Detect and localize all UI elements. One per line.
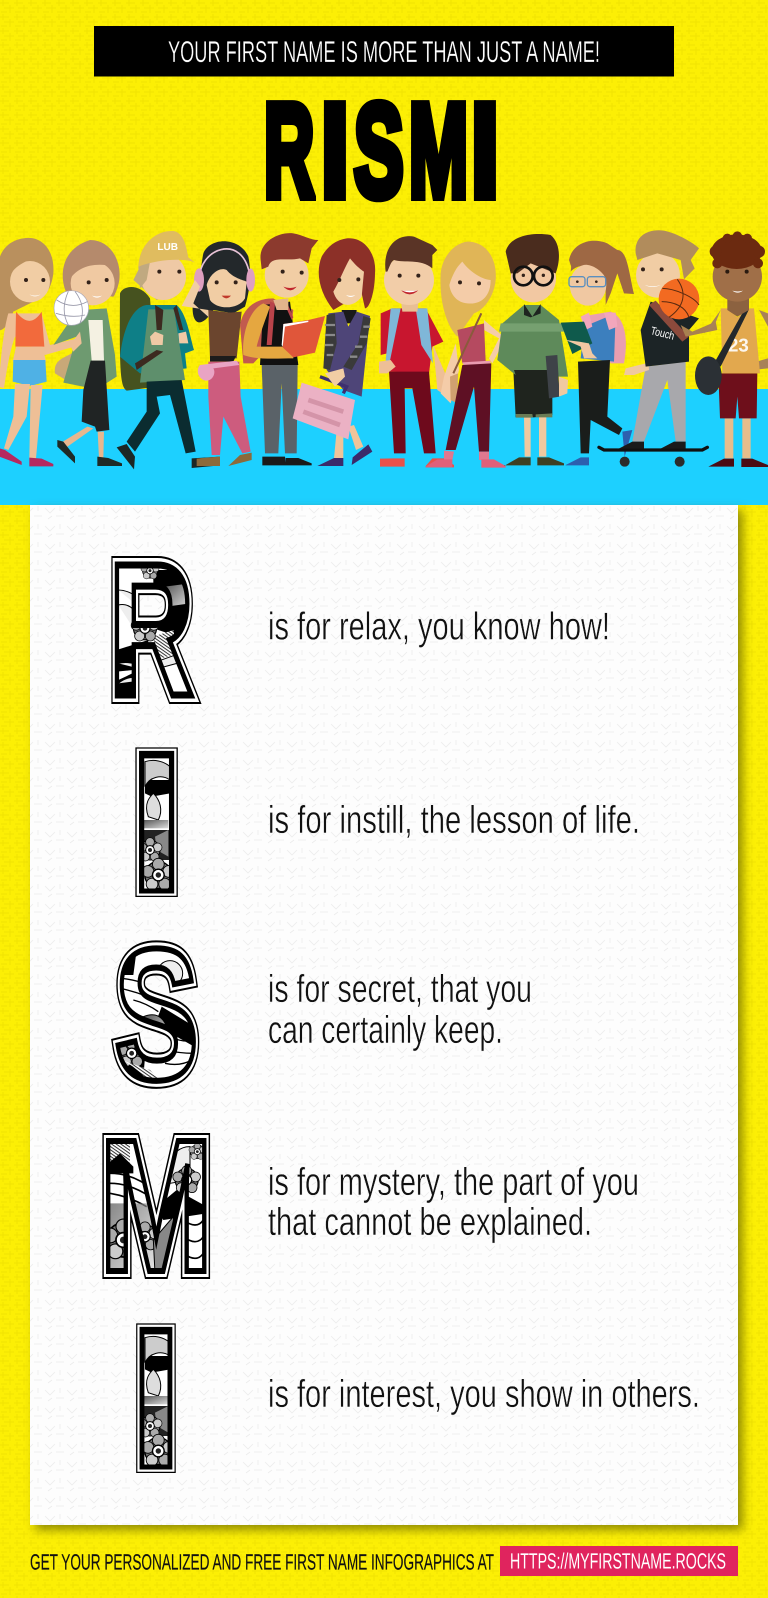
decorative letter I (second): I bbox=[129, 1287, 183, 1510]
decorative letter M: M bbox=[99, 1101, 213, 1312]
person: girl with headphones bbox=[182, 241, 255, 466]
decorative letter I bbox=[135, 747, 178, 897]
text: M lines bbox=[268, 1161, 639, 1244]
decorative letter R bbox=[111, 556, 202, 704]
person: blonde girl bbox=[426, 242, 506, 468]
top banner bbox=[94, 26, 674, 76]
text: S lines: is for secret, that you bbox=[268, 968, 532, 1011]
decorative letter S: S bbox=[114, 910, 199, 1119]
person: skater with basketball: Touch bbox=[649, 324, 676, 342]
decorative letter R: R bbox=[109, 525, 194, 736]
person: backpacker with cap bbox=[117, 231, 220, 469]
person: girl with red hair and pink bag bbox=[293, 238, 375, 466]
decorative letter M: M bbox=[99, 1101, 213, 1312]
person: skater with basketball bbox=[599, 230, 717, 467]
title: RISMI: I bbox=[321, 77, 348, 224]
footer call to action: GET YOUR PERSONALIZED AND FREE FIRST NAME INFOGRAPHICS AT bbox=[30, 1550, 494, 1574]
person: boy in red shirt bbox=[379, 236, 454, 467]
decorative letter M bbox=[102, 1133, 210, 1279]
decorative letter R: R bbox=[109, 525, 194, 736]
text: I line: is for instill, the lesson of life. bbox=[268, 799, 640, 842]
decorative letter I: I bbox=[128, 711, 186, 934]
illustration: right group of students bbox=[379, 230, 768, 468]
text: S lines: can certainly keep. bbox=[268, 1009, 503, 1052]
floor band bbox=[0, 389, 768, 505]
decorative letter M: M bbox=[99, 1101, 213, 1312]
person: girl with volleyball bbox=[53, 240, 122, 466]
title: RISMI: I bbox=[471, 77, 499, 224]
text: R line: is for relax, you know how! bbox=[268, 605, 610, 648]
person: backpacker with cap: LUB bbox=[157, 241, 178, 252]
decorative letter S bbox=[111, 940, 200, 1089]
illustration: left group of students bbox=[0, 231, 375, 469]
decorative letter I (second): I bbox=[129, 1287, 183, 1510]
decorative letter R: R bbox=[109, 525, 194, 736]
person: girl in orange top bbox=[0, 238, 80, 466]
title: RISMI bbox=[264, 77, 499, 224]
decorative letter I: I bbox=[128, 711, 186, 934]
title: RISMI: S bbox=[354, 77, 403, 224]
person: girl with pink backpack bbox=[561, 241, 634, 465]
person: boy with glasses and green sweater bbox=[497, 234, 568, 466]
text: M lines: that cannot be explained. bbox=[268, 1201, 592, 1244]
person: boy with book bbox=[240, 233, 325, 465]
panel: white card bbox=[30, 505, 738, 1525]
decorative letter I (second): I bbox=[129, 1287, 183, 1510]
text: M lines: is for mystery, the part of you bbox=[268, 1161, 639, 1204]
person: boy in basketball jersey: 23 bbox=[728, 335, 749, 356]
text: S lines bbox=[268, 968, 532, 1052]
decorative letter S: S bbox=[114, 910, 199, 1119]
decorative letter S: S bbox=[114, 910, 199, 1119]
title: RISMI: R bbox=[264, 77, 314, 224]
decorative letter I (second) bbox=[136, 1323, 176, 1473]
decorative letter I: I bbox=[128, 711, 186, 934]
person: boy in basketball jersey bbox=[695, 231, 768, 467]
title: RISMI: M bbox=[409, 77, 468, 224]
